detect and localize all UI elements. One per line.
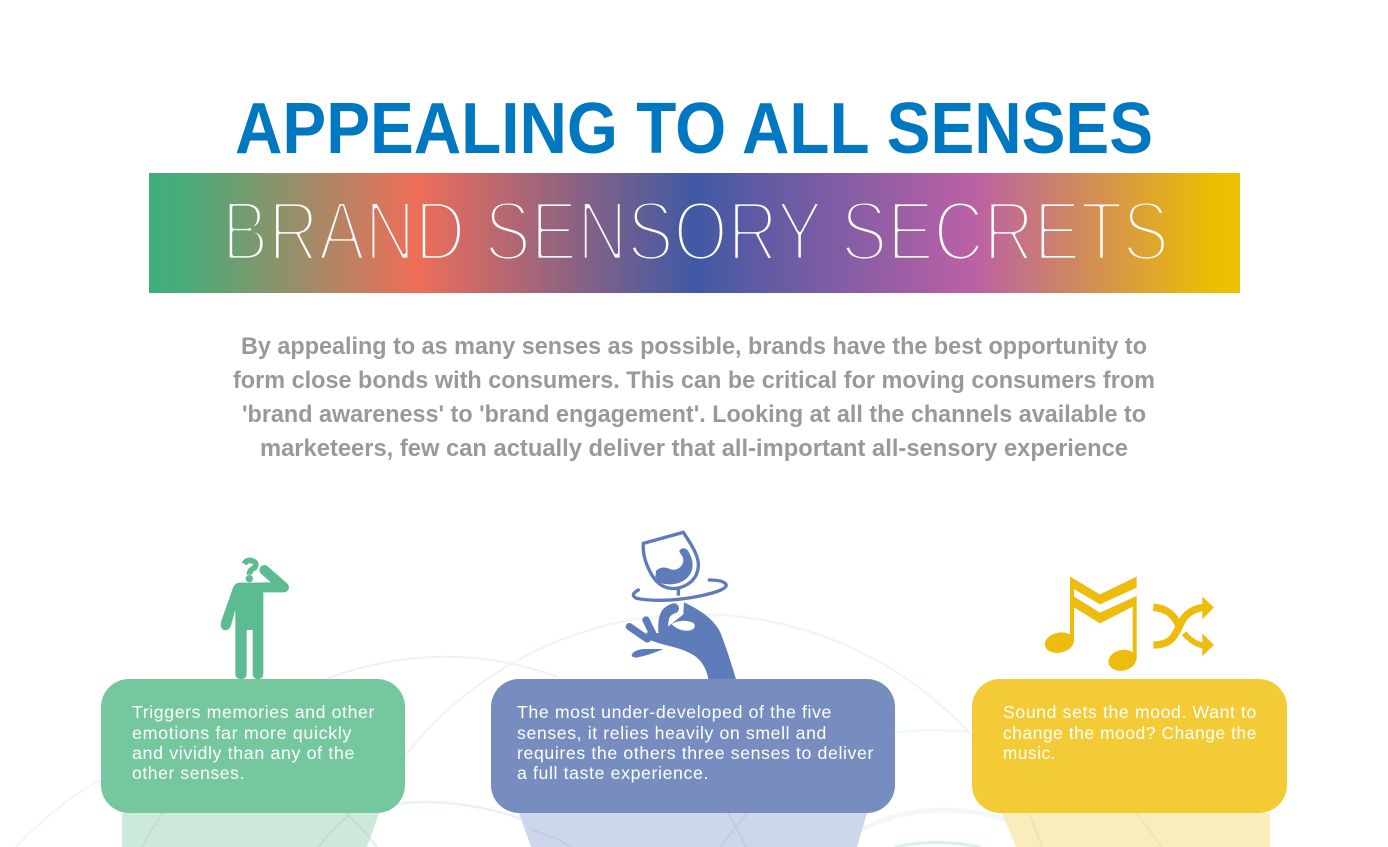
blue card text: senses, it relies heavily on smell and	[517, 723, 827, 743]
subtitle: BRAND SENSORY SECRETS	[222, 184, 1169, 278]
yellow card text: music.	[1003, 743, 1056, 763]
green card text: emotions far more quickly	[132, 723, 352, 743]
title: APPEALING TO ALL SENSES	[235, 89, 1153, 169]
yellow card text: Sound sets the mood. Want to	[1003, 702, 1257, 722]
funnel arcs	[143, 813, 1161, 847]
panel: blue card	[491, 679, 895, 813]
background arcs	[16, 614, 1042, 847]
yellow card text: change the mood? Change the	[1003, 723, 1257, 743]
panel: blue funnel	[519, 813, 867, 847]
panel: green card	[101, 679, 405, 813]
panel: yellow funnel	[1002, 813, 1270, 847]
blue card text: The most under-developed of the five	[517, 702, 832, 722]
icon: music note and shuffle	[1043, 577, 1214, 673]
green card text: other senses.	[132, 763, 245, 783]
intro paragraph: By appealing to as many senses as possible, brands have the best opportunity to	[241, 333, 1147, 360]
gradient banner	[149, 173, 1240, 293]
intro paragraph: marketeers, few can actually deliver that all-important all-sensory experience	[260, 435, 1128, 462]
blue card text	[517, 702, 874, 783]
icon: person with question mark	[221, 560, 284, 679]
green card text	[132, 702, 375, 783]
green card text: Triggers memories and other	[132, 702, 375, 722]
intro paragraph: form close bonds with consumers. This can be critical for moving consumers from	[233, 367, 1155, 394]
intro paragraph: 'brand awareness' to 'brand engagement'. Looking at all the channels available to	[242, 401, 1146, 428]
panel: green funnel	[122, 813, 379, 847]
panel: yellow card	[972, 679, 1287, 813]
intro paragraph	[233, 333, 1155, 462]
yellow card text	[1003, 702, 1257, 763]
blue card text: requires the others three senses to deliver	[517, 743, 874, 763]
icon: hand swirling wine glass	[629, 532, 736, 679]
green card text: and vividly than any of the	[132, 743, 355, 763]
blue card text: a full taste experience.	[517, 763, 709, 783]
